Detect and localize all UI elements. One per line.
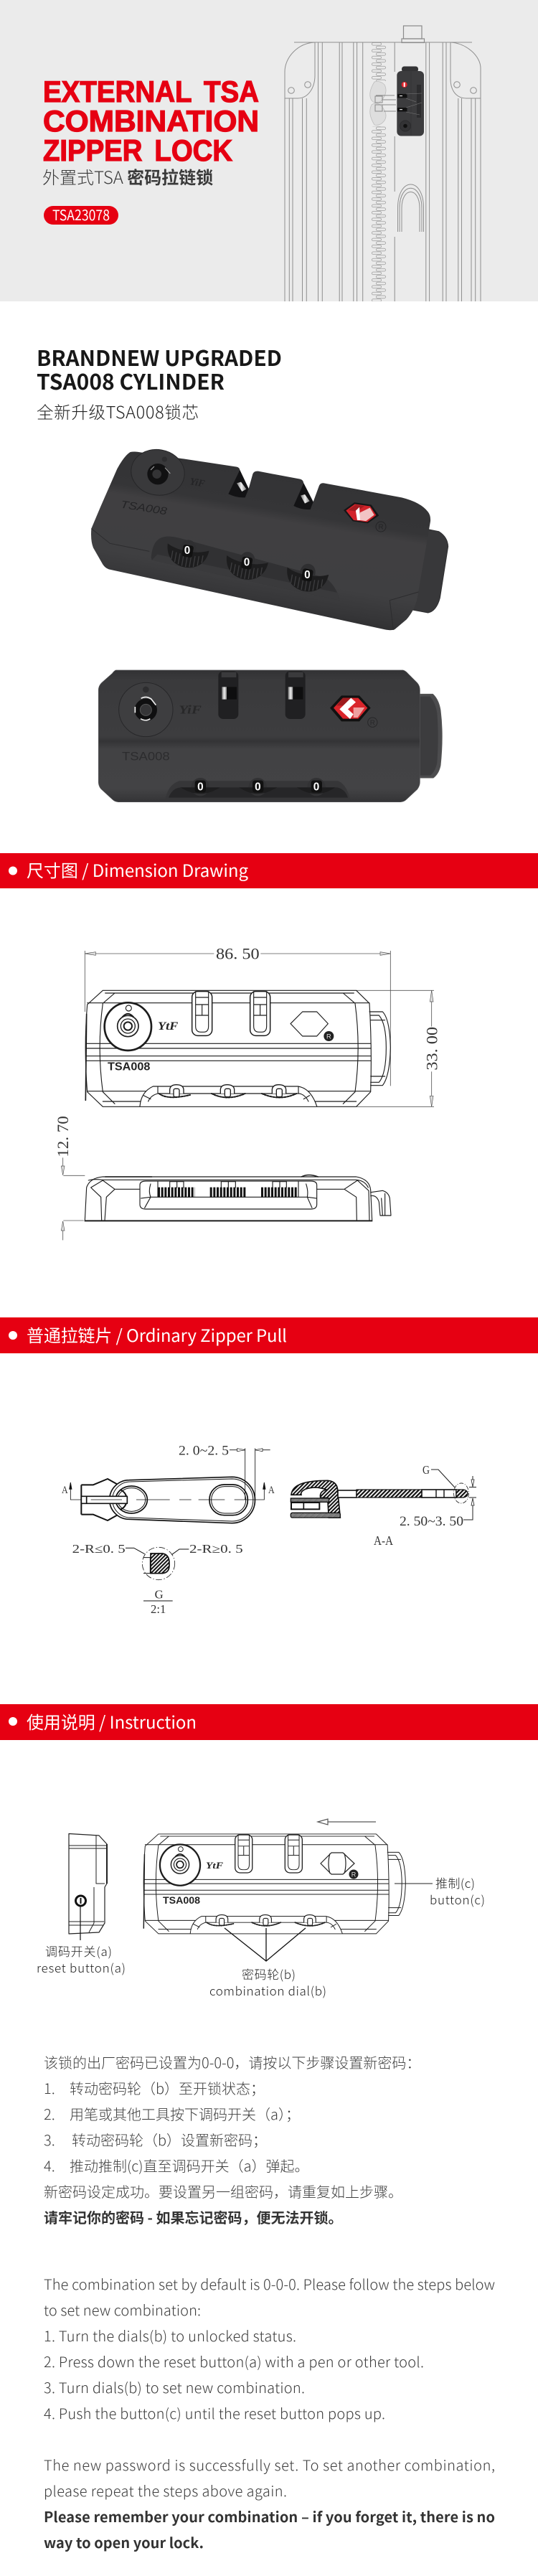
text block: English instructions: 4. Push the button(c) until the reset button pops up.	[44, 2402, 385, 2423]
label: reset button a: reset button(a)	[37, 1958, 126, 1976]
section heading: BRANDNEW UPGRADED	[37, 341, 282, 372]
model mark: TSA008	[108, 1061, 151, 1073]
title: ZIPPER LOCK	[43, 133, 232, 167]
panel: hero	[0, 0, 538, 301]
text block: English instructions: way to open your lock.	[44, 2532, 204, 2552]
text block: Chinese instructions: 请牢记你的密码 - 如果忘记密码，便无法开锁。	[44, 2206, 342, 2227]
text block: English instructions	[44, 2273, 495, 2552]
section bar: ordinary zipper pull	[0, 1317, 538, 1353]
engraved model: TSA008	[120, 499, 169, 518]
section heading	[37, 341, 282, 396]
small lock on suitcase	[397, 66, 424, 136]
text block: English instructions: The combination set by default is 0-0-0. Please follow the steps below	[44, 2273, 495, 2294]
engraved brand: YiF	[189, 476, 206, 490]
thickness dimension	[400, 1476, 476, 1529]
slots	[218, 671, 306, 719]
registered mark	[324, 1031, 334, 1041]
text block: English instructions: please repeat the steps above again.	[44, 2480, 287, 2501]
height dimension	[357, 990, 440, 1106]
leader G	[423, 1463, 455, 1487]
panel: dimension drawing	[54, 945, 440, 1240]
TSA logo	[330, 695, 371, 721]
TSA logo outline	[321, 1853, 354, 1874]
width dimension	[85, 945, 390, 1086]
front view of lock: R	[351, 1871, 357, 1879]
lock body	[98, 670, 420, 802]
text block: Chinese instructions: 转动密码轮（b）至开锁状态；	[70, 2077, 265, 2098]
detail G: G	[155, 1587, 164, 1601]
lock body	[91, 451, 430, 630]
combination dials: 0	[255, 781, 261, 793]
slider and pull outline	[81, 1477, 255, 1523]
product photo: angled lock: R	[378, 524, 384, 532]
engraved model: TSA008	[122, 749, 170, 763]
model mark: TSA008	[163, 1894, 200, 1906]
zipper sliders	[370, 82, 386, 125]
registered mark	[349, 1870, 359, 1879]
combination dials: 0	[197, 781, 204, 793]
thickness dimension	[54, 1116, 85, 1240]
text block: Chinese instructions: 3.	[44, 2129, 55, 2150]
push button	[418, 694, 442, 778]
text block: Chinese instructions	[44, 2051, 420, 2227]
hero background	[0, 0, 538, 301]
label: reset button a	[37, 1942, 126, 1976]
text block: Chinese instructions: 1.	[44, 2077, 55, 2098]
TSA logo	[342, 501, 380, 525]
label: combination dial b: 密码轮(b)	[242, 1965, 296, 1983]
title: COMBINATION	[43, 104, 259, 138]
brand mark: YtF	[206, 1860, 223, 1871]
section bar: dimension drawing	[0, 853, 538, 888]
text block: Chinese instructions: 转动密码轮（b）设置新密码；	[72, 2129, 267, 2150]
thickness dimension: 2. 50~3. 50	[400, 1514, 463, 1529]
label: combination dial b: combination dial(b)	[209, 1981, 326, 1999]
title	[43, 75, 259, 167]
text block: Chinese instructions: 4.	[44, 2155, 55, 2176]
engraved brand: YiF	[179, 703, 202, 717]
text block: English instructions: to set new combination:	[44, 2299, 201, 2320]
label: combination dial b	[209, 1928, 326, 1999]
combination dials	[181, 778, 335, 796]
label: button c	[395, 1874, 485, 1908]
section bar: dimension drawing: 尺寸图 / Dimension Drawing	[27, 857, 248, 882]
suitcase shell lines	[285, 42, 481, 301]
label: reset button a: 调码开关(a)	[45, 1942, 112, 1960]
dial recess	[151, 537, 339, 601]
section bar: ordinary zipper pull: 普通拉链片 / Ordinary Zipper Pull	[27, 1322, 287, 1347]
section bar: instruction: 使用说明 / Instruction	[27, 1708, 197, 1734]
suitcase U-shaped recess	[397, 184, 423, 232]
slider section	[291, 1480, 340, 1518]
panel: instruction diagram	[37, 1819, 485, 1999]
front view drawing	[85, 990, 390, 1106]
text block: English instructions: 2. Press down the reset button(a) with a pen or other tool.	[44, 2351, 424, 2371]
slot shadows and pins	[228, 470, 249, 497]
combination dials: 0	[313, 781, 319, 793]
product photo: angled lock	[91, 446, 448, 630]
key disc	[128, 446, 188, 499]
text block: English instructions: 3. Turn dials(b) to set new combination.	[44, 2377, 305, 2397]
detail G	[72, 1542, 243, 1616]
section label: A-A	[374, 1533, 393, 1548]
section heading: TSA008 CYLINDER	[37, 365, 225, 396]
zipper teeth	[372, 42, 386, 81]
label: button c: 推制(c)	[435, 1874, 475, 1891]
panel: zipper pull drawing, front view: A	[268, 1485, 275, 1496]
combination dials: 0	[244, 557, 250, 569]
title: EXTERNAL TSA	[43, 75, 259, 108]
leader G: G	[423, 1463, 430, 1477]
reset button	[76, 1896, 86, 1940]
registered mark	[368, 718, 377, 727]
bottom view drawing	[85, 1175, 391, 1221]
front view of lock	[143, 1834, 405, 1934]
detail G: 2:1	[151, 1602, 166, 1616]
height dimension: 33. 00	[423, 1027, 440, 1071]
suitcase handle	[402, 26, 425, 43]
section bar: instruction	[0, 1704, 538, 1740]
wall thickness dimension	[179, 1443, 270, 1500]
section labels: A	[62, 1485, 68, 1496]
text block: Chinese instructions: 该锁的出厂密码已设置为0-0-0，请按以下步骤设置新密码：	[44, 2051, 420, 2072]
push direction arrow	[318, 1819, 376, 1825]
push button	[412, 529, 448, 613]
combination dials: 0	[304, 569, 311, 581]
side view of lock	[69, 1834, 107, 1934]
TSA logo outline	[291, 1012, 328, 1036]
section subheading: 全新升级TSA008锁芯	[37, 399, 199, 423]
text block: Chinese instructions: 推动推制(c)直至调码开关（a）弹起。	[70, 2155, 309, 2176]
product photo: front lock	[98, 670, 442, 802]
product photo: front lock: R	[370, 719, 375, 727]
panel: zipper pull drawing, section view	[291, 1463, 476, 1548]
text block: Chinese instructions: 新密码设定成功。要设置另一组密码，请重复如上步骤。	[44, 2181, 402, 2201]
panel: zipper pull drawing, front view	[62, 1443, 275, 1616]
registered mark	[376, 522, 386, 532]
text block: English instructions: The new password is successfully set. To set another combination,	[44, 2454, 495, 2475]
width dimension: 86. 50	[216, 945, 260, 963]
pull bar section	[338, 1483, 469, 1503]
combination dials: 0	[184, 545, 190, 557]
model badge: TSA23078	[52, 204, 110, 225]
detail G: 2-R≤0. 5	[72, 1542, 126, 1556]
wall thickness dimension: 2. 0~2. 5	[179, 1443, 229, 1458]
thickness dimension: 12. 70	[54, 1116, 72, 1157]
combination dials	[164, 536, 330, 595]
text block: English instructions: Please remember your combination – if you forget it, there is no	[44, 2506, 495, 2526]
subtitle: 外置式TSA 密码拉链锁	[42, 164, 213, 189]
center line and section arrows	[70, 1482, 265, 1500]
dial recess	[165, 781, 350, 802]
panel: upgraded cylinder	[37, 341, 448, 802]
brand mark: YtF	[158, 1020, 178, 1033]
text block: Chinese instructions: 用笔或其他工具按下调码开关（a）；	[70, 2103, 300, 2124]
suitcase line drawing	[285, 26, 481, 301]
text block: English instructions: 1. Turn the dials(b) to unlocked status.	[44, 2325, 296, 2346]
front view drawing: R	[326, 1033, 331, 1040]
key disc	[119, 682, 173, 737]
label: button c: button(c)	[430, 1890, 485, 1908]
detail G: 2-R≥0. 5	[189, 1542, 243, 1556]
text block: Chinese instructions: 2.	[44, 2103, 55, 2124]
